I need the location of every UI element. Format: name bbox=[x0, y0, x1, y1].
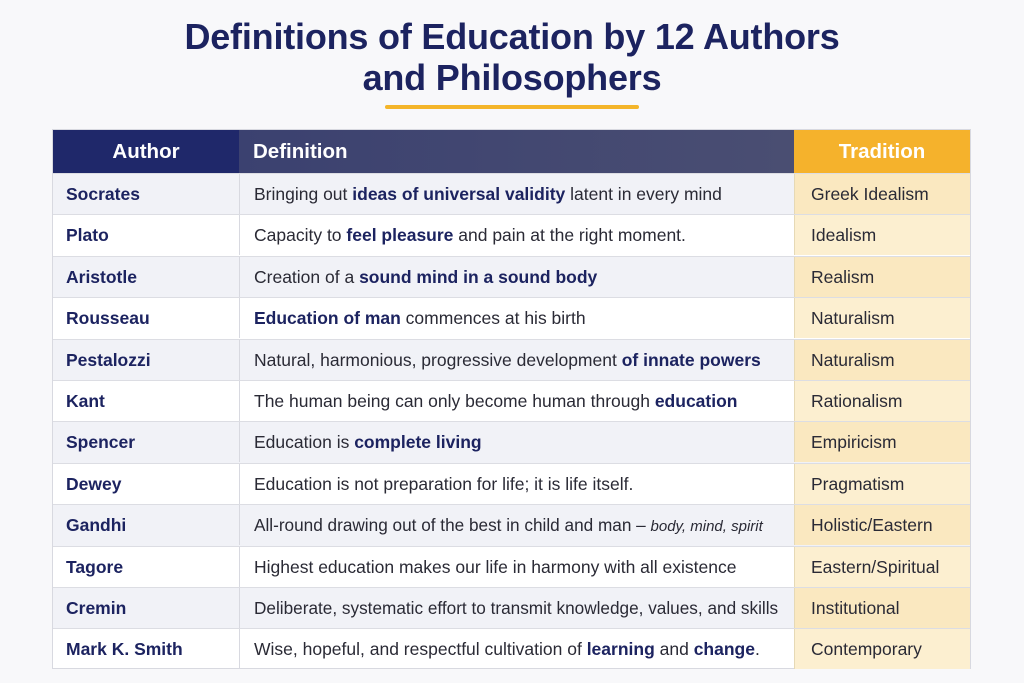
table header bbox=[53, 130, 970, 173]
row: Mark K. Smith: Mark K. Smith bbox=[66, 639, 183, 659]
row: Dewey bbox=[53, 463, 970, 504]
row: Plato bbox=[53, 214, 970, 256]
title: and Philosophers bbox=[363, 57, 661, 98]
row: Socrates: Bringing out ideas of universal validity latent in every mind bbox=[254, 184, 722, 204]
row: Aristotle: Aristotle bbox=[66, 267, 137, 287]
row: Socrates: Socrates bbox=[66, 184, 140, 204]
row: Mark K. Smith: Wise, hopeful, and respectful cultivation of learning and change. bbox=[254, 639, 760, 659]
row: Tagore: Tagore bbox=[66, 557, 123, 577]
row: Rousseau: Naturalism bbox=[811, 308, 895, 328]
row: Tagore bbox=[53, 546, 970, 587]
row: Kant bbox=[53, 380, 970, 421]
row: Aristotle bbox=[53, 256, 970, 297]
title underline bbox=[385, 105, 639, 109]
row: Dewey: Dewey bbox=[66, 474, 121, 494]
row: Spencer: Spencer bbox=[66, 432, 135, 452]
row: Mark K. Smith: Contemporary bbox=[811, 639, 922, 659]
row: Plato: Plato bbox=[66, 225, 109, 245]
row: Aristotle: Creation of a sound mind in a sound body bbox=[254, 267, 597, 287]
row: Spencer: Education is complete living bbox=[254, 432, 482, 452]
row: Dewey: Education is not preparation for life; it is life itself. bbox=[254, 474, 633, 494]
row: Pestalozzi: Pestalozzi bbox=[66, 350, 151, 370]
row: Dewey: Pragmatism bbox=[811, 474, 904, 494]
row: Spencer bbox=[53, 421, 970, 463]
row: Gandhi: Gandhi bbox=[66, 515, 126, 535]
title bbox=[184, 16, 840, 98]
row: Rousseau bbox=[53, 297, 970, 339]
row: Kant: Rationalism bbox=[811, 391, 902, 411]
row: Rousseau: Rousseau bbox=[66, 308, 150, 328]
row: Cremin: Cremin bbox=[66, 598, 126, 618]
row: Plato: Idealism bbox=[811, 225, 876, 245]
row: Kant: Kant bbox=[66, 391, 105, 411]
row: Pestalozzi: Naturalism bbox=[811, 350, 895, 370]
row: Aristotle: Realism bbox=[811, 267, 874, 287]
title: Definitions of Education by 12 Authors bbox=[184, 16, 840, 57]
row: Tagore: Highest education makes our life in harmony with all existence bbox=[254, 557, 736, 577]
row: Cremin: Deliberate, systematic effort to transmit knowledge, values, and skills bbox=[254, 598, 778, 618]
row: Socrates bbox=[53, 173, 970, 214]
row: Rousseau: Education of man commences at his birth bbox=[254, 308, 586, 328]
row: Pestalozzi bbox=[53, 339, 970, 380]
table header: Author bbox=[112, 140, 180, 163]
row: Gandhi: All-round drawing out of the best in child and man – body, mind, spirit bbox=[254, 515, 763, 535]
row: Cremin: Institutional bbox=[811, 598, 900, 618]
table header: Tradition bbox=[839, 140, 925, 163]
row: Pestalozzi: Natural, harmonious, progressive development of innate powers bbox=[254, 350, 761, 370]
table bbox=[52, 129, 971, 669]
row: Plato: Capacity to feel pleasure and pain at the right moment. bbox=[254, 225, 686, 245]
row: Cremin bbox=[53, 587, 970, 628]
row: Gandhi bbox=[53, 504, 970, 546]
row: Socrates: Greek Idealism bbox=[811, 184, 929, 204]
row: Spencer: Empiricism bbox=[811, 432, 897, 452]
row: Kant: The human being can only become human through education bbox=[254, 391, 737, 411]
table header: Definition bbox=[253, 140, 348, 163]
row: Mark K. Smith bbox=[53, 628, 970, 670]
row: Gandhi: Holistic/Eastern bbox=[811, 515, 933, 535]
row: Tagore: Eastern/Spiritual bbox=[811, 557, 939, 577]
